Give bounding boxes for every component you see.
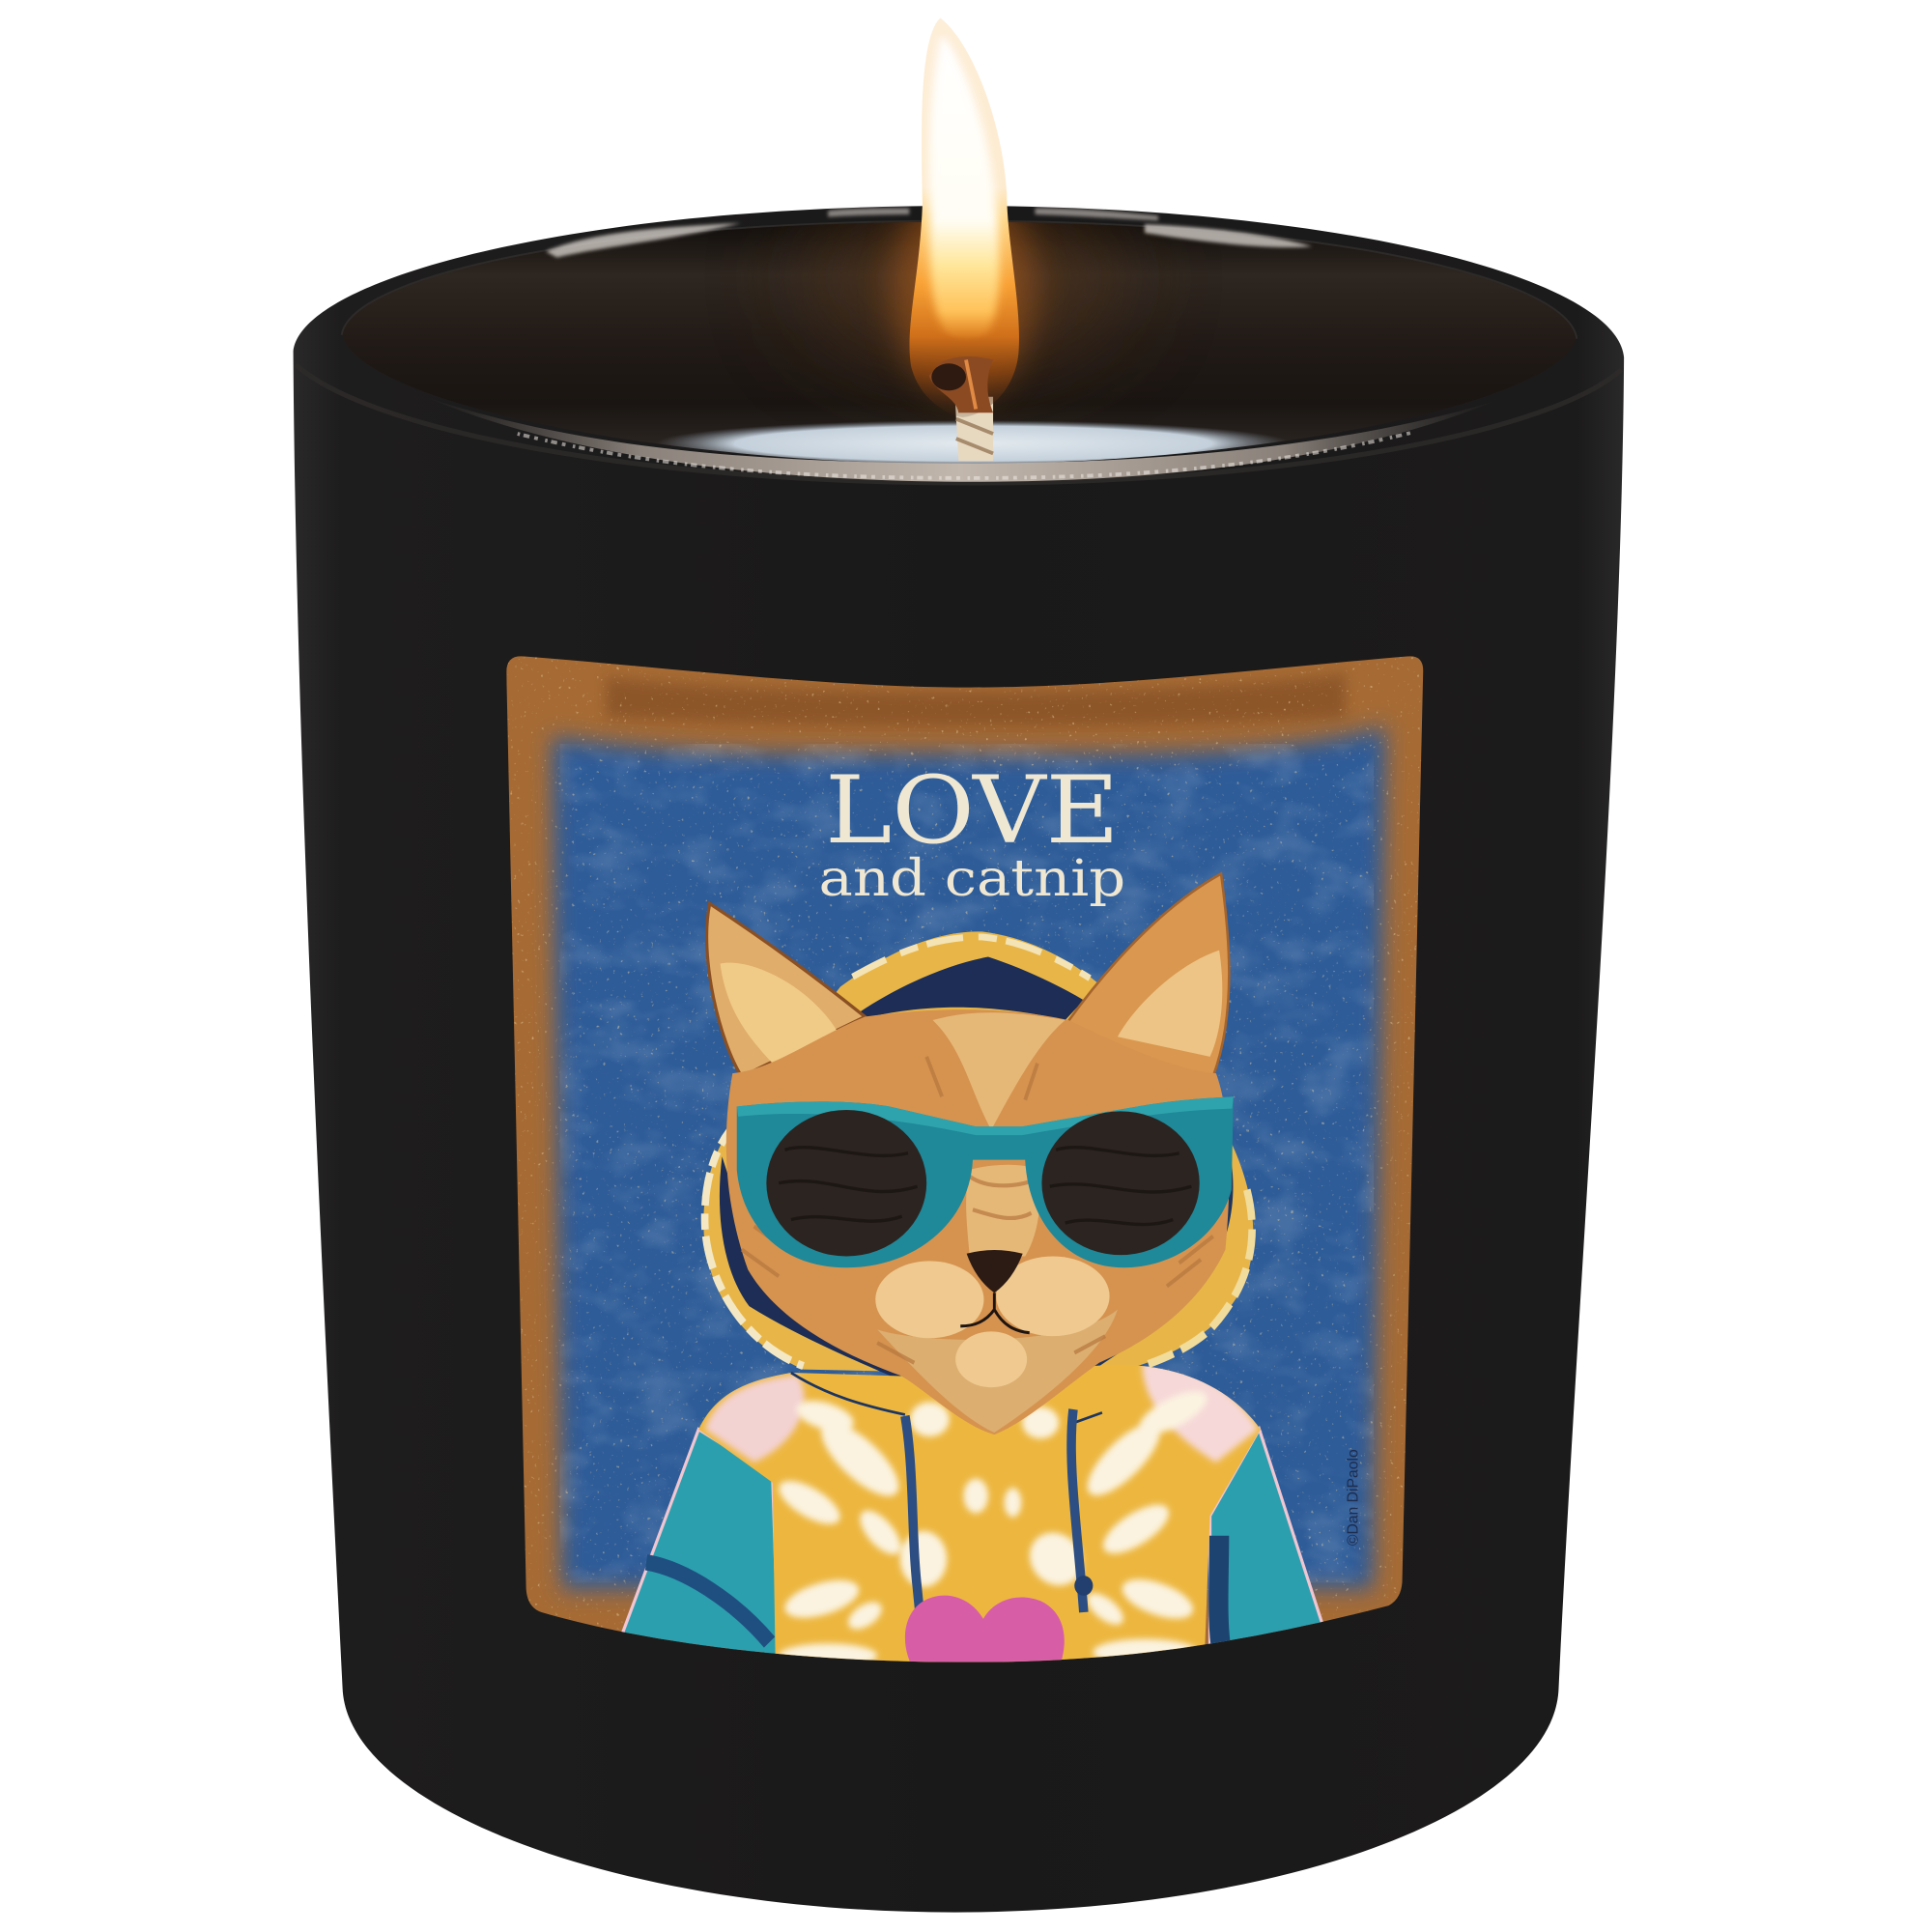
jar opening interior xyxy=(342,222,1577,462)
rust border xyxy=(483,638,1449,1681)
blue background xyxy=(552,727,1385,1589)
burnt wick top xyxy=(929,356,993,412)
silver front rim glint xyxy=(425,397,1497,482)
subheading: and catnip: and catnip xyxy=(819,848,1125,908)
jar body xyxy=(294,206,1624,1913)
sleeve stripes xyxy=(646,1562,770,1642)
artist signature: ©Dan DiPaolo xyxy=(1346,1449,1361,1546)
tie-dye pattern xyxy=(705,1363,1258,1667)
heading: LOVE: LOVE xyxy=(825,756,1120,865)
cat label xyxy=(483,638,1449,1681)
rim highlights xyxy=(546,209,1312,258)
candle product illustration xyxy=(294,17,1625,1913)
cat ears xyxy=(707,873,1229,1077)
hoodie body xyxy=(621,1363,1328,1675)
mottled paint wear xyxy=(560,744,1374,1582)
dark lenses xyxy=(766,1110,926,1257)
pink heart xyxy=(905,1596,1065,1675)
collar line xyxy=(791,1373,1102,1423)
muzzle xyxy=(875,1257,1110,1387)
hood xyxy=(703,931,1253,1379)
nose and mouth xyxy=(960,1250,1030,1333)
paint speckle xyxy=(483,638,1449,1681)
candle flame xyxy=(909,18,1019,417)
wick rope xyxy=(955,397,993,461)
wax surface xyxy=(661,421,1284,464)
sleeves xyxy=(621,1430,779,1662)
torso xyxy=(698,1365,1261,1675)
drawstrings xyxy=(905,1416,923,1662)
jar rim band xyxy=(296,222,1622,483)
cat head xyxy=(726,1009,1229,1435)
sunglasses xyxy=(737,1096,1234,1267)
